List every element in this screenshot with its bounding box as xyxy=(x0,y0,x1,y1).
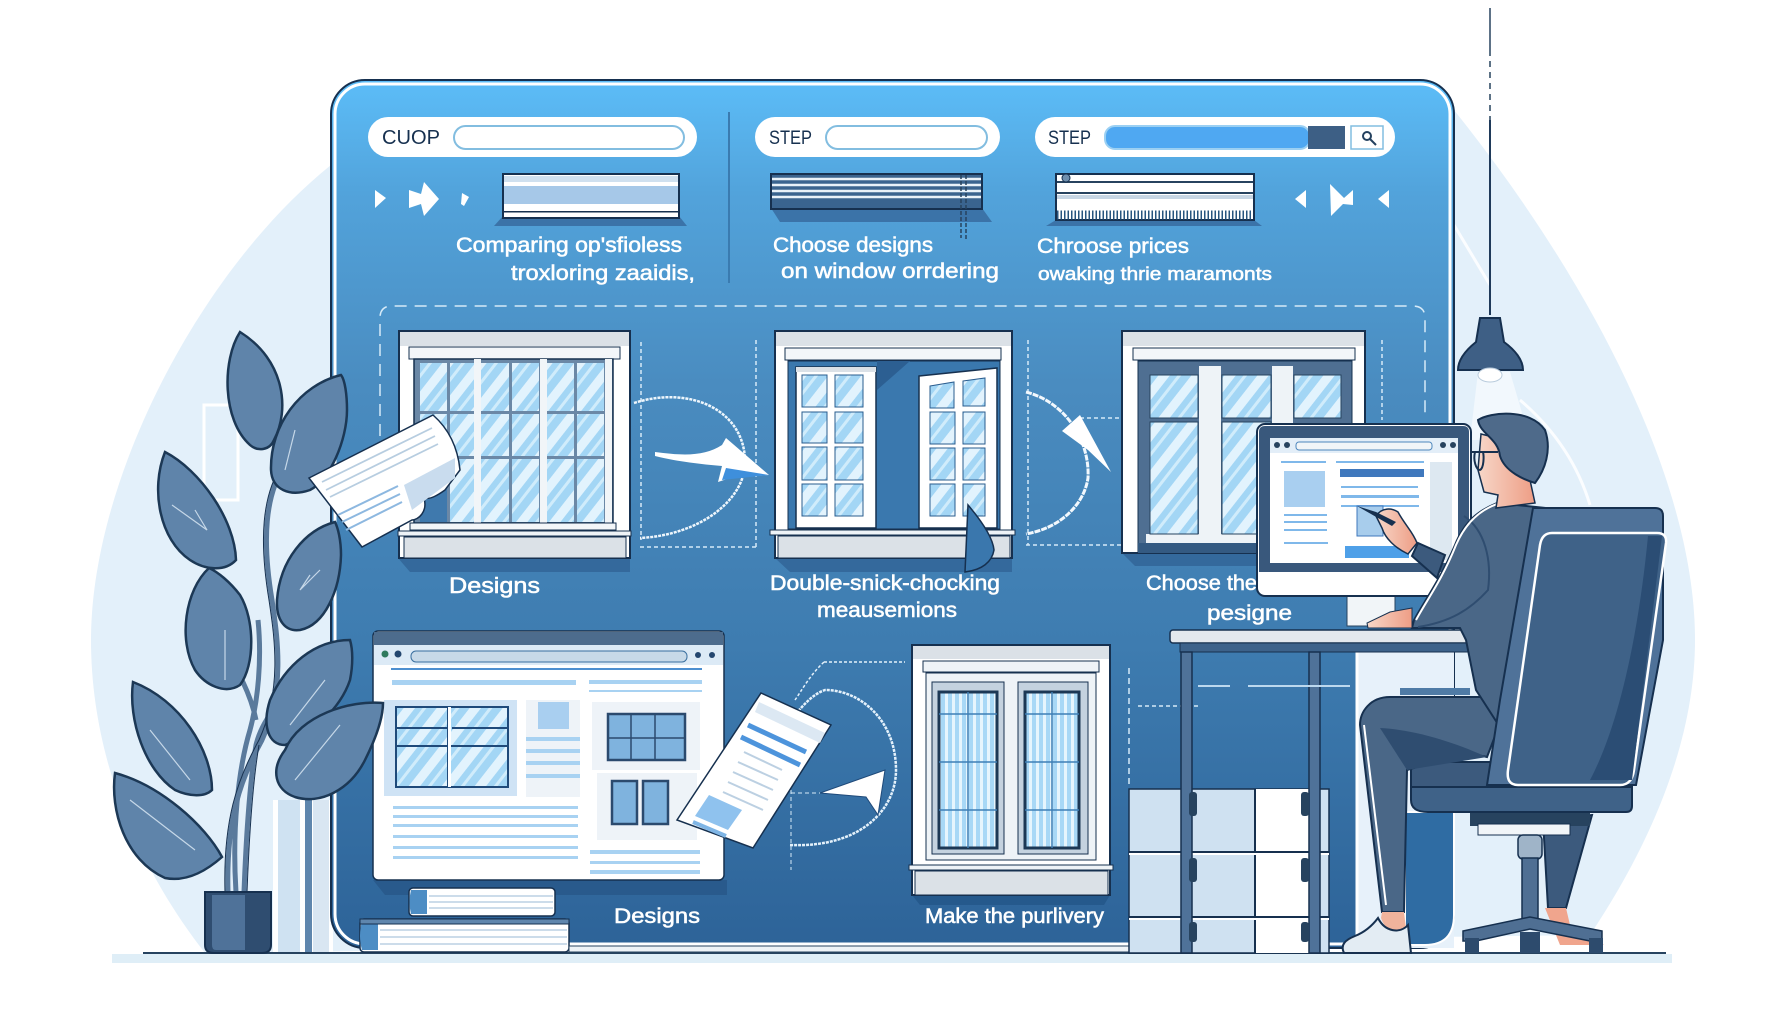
caption: comparing: Comparing op'sfioless xyxy=(456,234,682,257)
tile stack xyxy=(1129,789,1329,953)
label: Designs lower: Designs xyxy=(614,905,700,928)
caption: choose designs: on window orrdering xyxy=(781,260,999,283)
monitor xyxy=(1257,424,1471,626)
plant stems xyxy=(218,465,300,892)
panel: main blue board xyxy=(331,80,1454,948)
search bar: CUOP xyxy=(368,117,697,157)
arrow: step one to two xyxy=(634,397,769,538)
caption: choose designs: Choose designs xyxy=(773,234,933,257)
panes xyxy=(1150,375,1341,534)
right light streaks xyxy=(1454,225,1590,505)
measure guides xyxy=(640,340,1382,706)
caption: comparing: troxloring zaaidis, xyxy=(511,262,695,285)
person: neck and face xyxy=(1478,434,1535,508)
paper: brochure lower xyxy=(677,693,831,848)
screen content xyxy=(1281,461,1452,560)
sill xyxy=(398,523,631,558)
arrows: right set xyxy=(1295,184,1389,216)
pot xyxy=(205,892,271,953)
floor xyxy=(112,952,1672,963)
main window image xyxy=(384,700,517,796)
person: torso and arm xyxy=(1357,503,1565,735)
pale area under desk xyxy=(1356,652,1470,948)
label STEP: STEP xyxy=(1048,128,1091,149)
label: choose the designs xyxy=(1146,572,1292,625)
label: make the purlivery: Make the purlivery xyxy=(925,905,1105,928)
window 4 with curtains xyxy=(909,645,1113,905)
dashed grouping frame xyxy=(380,306,1425,436)
panes xyxy=(420,363,604,522)
plant xyxy=(114,332,383,953)
arrow: paper to window xyxy=(790,662,905,870)
search bar: STEP 2 xyxy=(755,117,1000,157)
ankle xyxy=(1381,912,1406,931)
background blob xyxy=(91,110,1695,953)
resting hand xyxy=(1367,608,1412,628)
curtain panes xyxy=(939,692,1079,848)
label: double checking: Double-snick-chocking xyxy=(770,572,1000,595)
caption: choose prices xyxy=(1037,235,1272,284)
thumbnail panels xyxy=(592,702,700,840)
arrows: left set xyxy=(375,182,469,216)
window 1 xyxy=(398,331,631,572)
sill xyxy=(770,530,1015,558)
label CUOP: CUOP xyxy=(382,127,440,149)
person: far foot xyxy=(1545,908,1604,945)
caption: comparing xyxy=(456,234,695,285)
person: glasses xyxy=(1472,452,1498,470)
pale pillars behind plant xyxy=(204,405,333,953)
lamp xyxy=(1458,8,1530,440)
caption: choose prices: owaking thrie maramonts xyxy=(1038,264,1272,284)
paper: document on plant xyxy=(309,415,460,547)
icon: magnifier xyxy=(1363,132,1376,145)
caption: choose designs xyxy=(773,234,999,283)
sill xyxy=(909,865,1113,895)
panel divider xyxy=(728,112,730,283)
guide below xyxy=(1128,668,1130,786)
label: choose the designs: Choose the xyxy=(1146,572,1257,595)
blind 1 xyxy=(494,174,687,226)
desk xyxy=(1170,630,1475,953)
curled flap xyxy=(965,505,994,572)
window 2 xyxy=(770,331,1015,572)
label: choose the designs: pesigne xyxy=(1207,602,1292,625)
person: near leg xyxy=(1343,697,1510,953)
blind cord xyxy=(961,175,966,240)
raised hand with stylus xyxy=(1376,509,1417,554)
caption: choose prices: Chroose prices xyxy=(1037,235,1189,258)
open casement xyxy=(919,368,997,528)
raised forearm xyxy=(1412,543,1445,578)
label: Designs: Designs xyxy=(449,573,540,598)
window 3 xyxy=(1122,331,1365,566)
search bar: STEP 3 xyxy=(1035,117,1395,157)
arrow: step two to three xyxy=(1026,392,1111,534)
person: far leg xyxy=(1543,815,1592,908)
left casement xyxy=(796,367,876,528)
desk legs xyxy=(1181,652,1320,953)
office chair seat xyxy=(1411,762,1632,812)
office chair base xyxy=(1463,812,1603,953)
shoe xyxy=(1343,918,1411,953)
person: hair xyxy=(1478,414,1548,483)
books xyxy=(360,888,569,952)
page text lines xyxy=(391,668,702,874)
panel bottom trim xyxy=(569,946,1129,952)
browser mockup xyxy=(373,631,727,895)
blind 3 xyxy=(1046,174,1262,226)
leaves xyxy=(114,332,383,879)
label: double checking xyxy=(770,572,1000,622)
leaf veins xyxy=(130,430,340,850)
blind 2 xyxy=(771,174,992,240)
label STEP: STEP xyxy=(769,128,812,149)
label: double checking: meausemions xyxy=(817,599,957,622)
side column xyxy=(526,700,580,797)
office chair back xyxy=(1487,508,1666,785)
